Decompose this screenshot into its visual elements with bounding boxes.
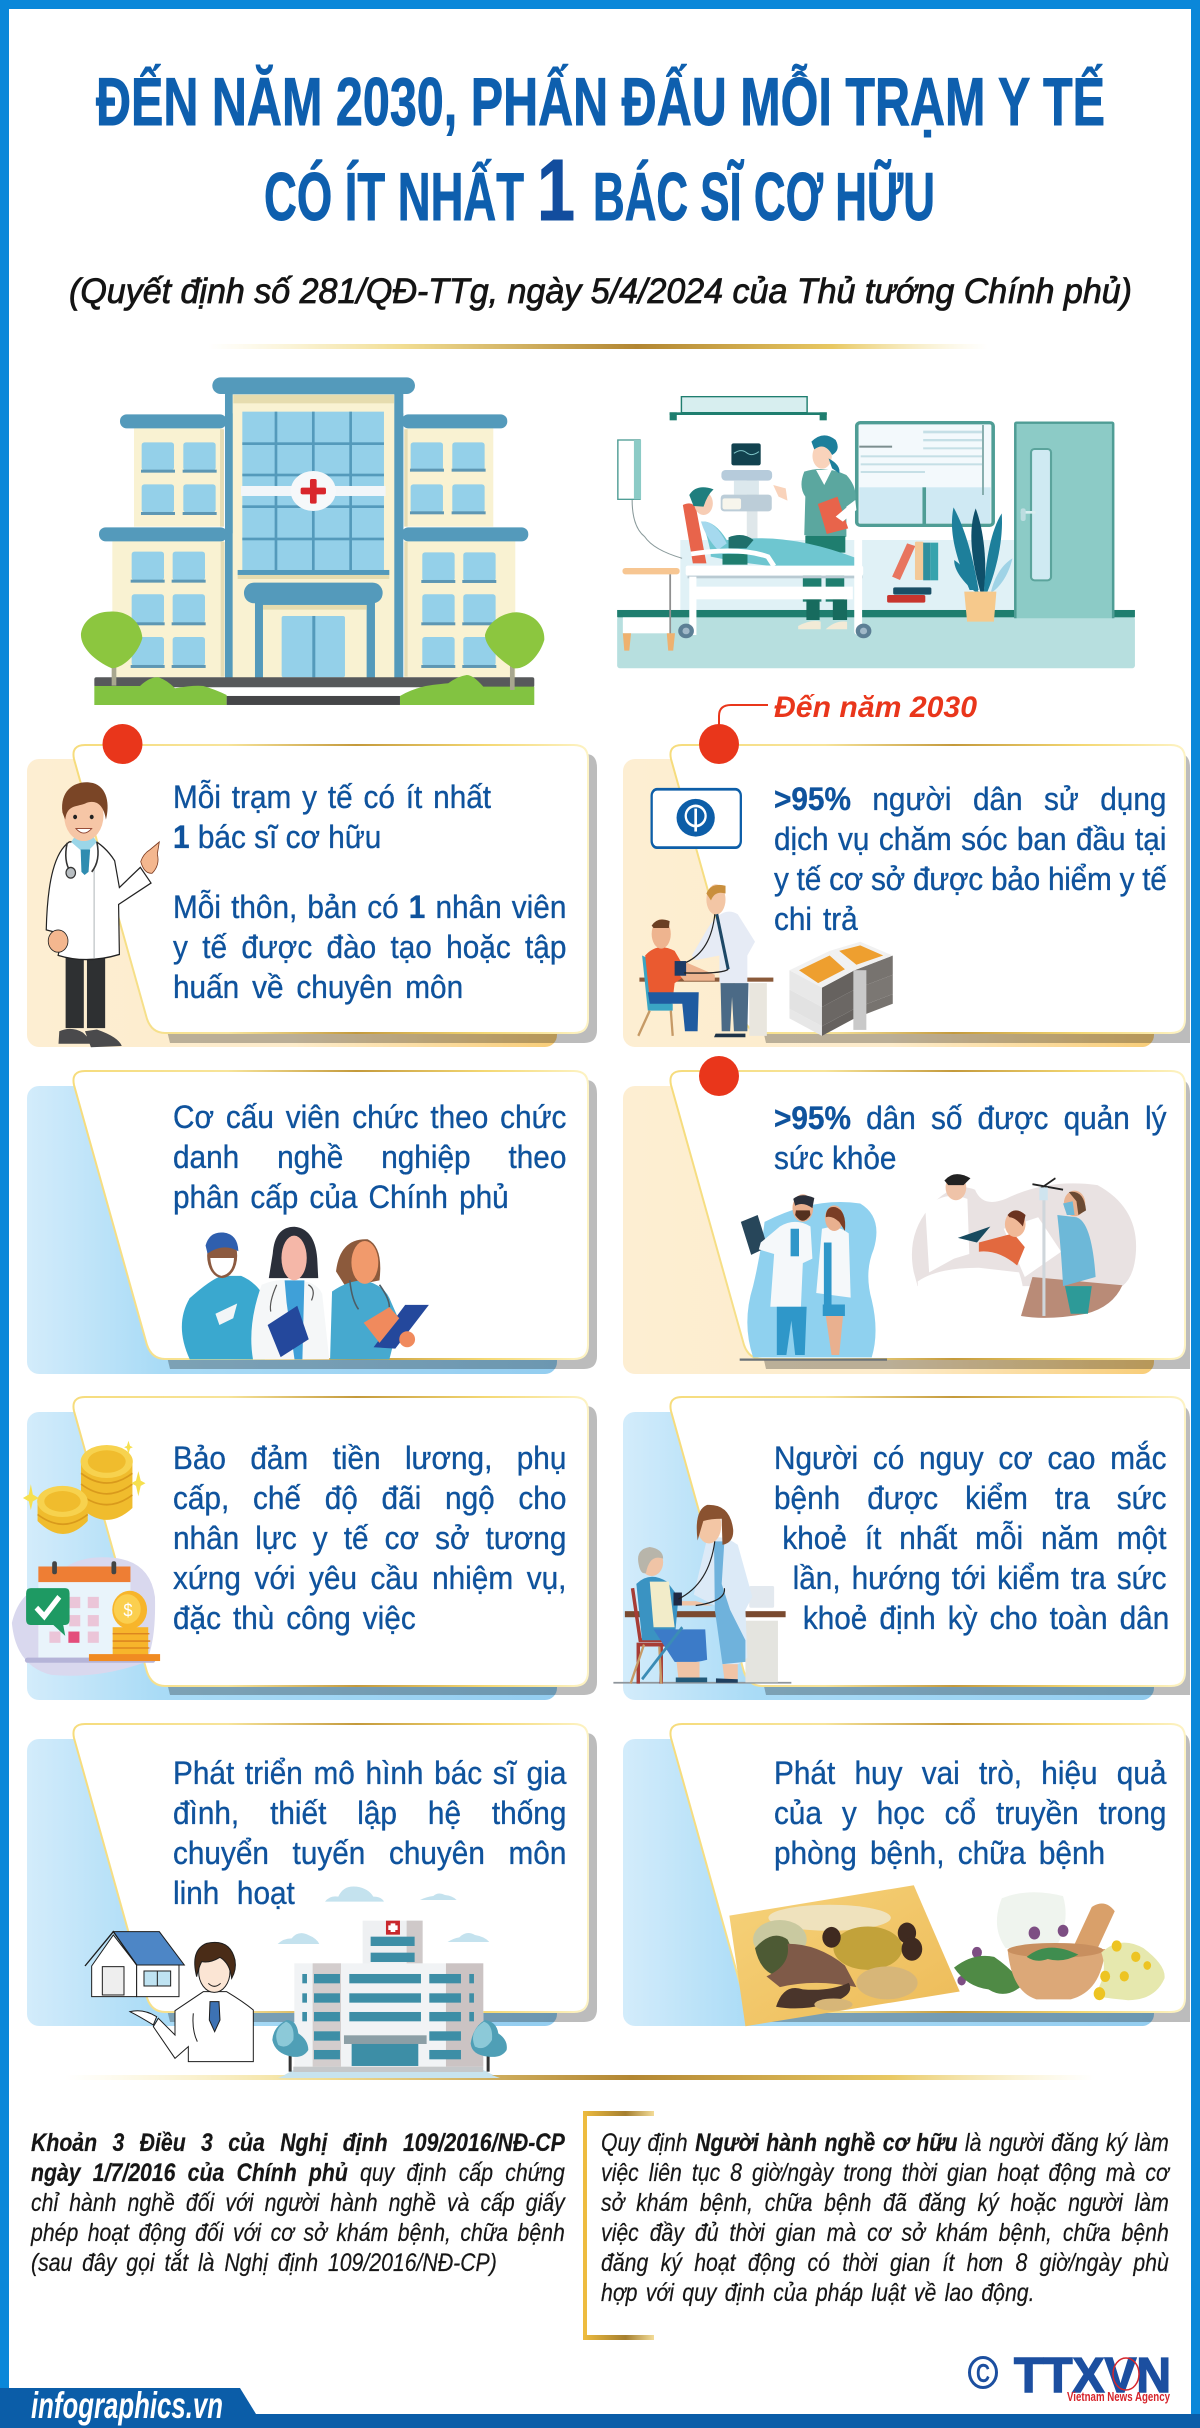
note: left legal reference bbox=[30, 2129, 566, 2277]
herb piles bbox=[753, 1905, 922, 2011]
illustration: blood pressure check bbox=[638, 884, 773, 1037]
text: left 4: chuyển tuyến chuyên môn bbox=[173, 1835, 566, 1871]
bed frame bbox=[686, 566, 863, 576]
title: BÁC SĨ CƠ HỮU bbox=[593, 158, 935, 235]
iv unit bbox=[618, 440, 682, 558]
text: left 4: linh hoạt bbox=[173, 1875, 295, 1911]
note: right definition: việc đầy đủ thời gian mà cơ sở khám bệnh, chữa bệnh bbox=[601, 2219, 1169, 2247]
staff: surgeon bbox=[182, 1232, 265, 1359]
text: right 1: chi trả bbox=[774, 901, 858, 937]
illustration: patient care scene bbox=[912, 1174, 1136, 1318]
text: left 3: đặc thù công việc bbox=[173, 1600, 416, 1636]
note: right definition bbox=[601, 2129, 1170, 2307]
illustration: hospital ward room bbox=[617, 397, 1135, 668]
card backing: right 3 bbox=[623, 1397, 1190, 1700]
nurse bbox=[773, 435, 856, 629]
ward door bbox=[1014, 422, 1114, 618]
doctor male bbox=[759, 1194, 814, 1355]
hospital base over divider bbox=[278, 2072, 500, 2078]
small hospital bbox=[272, 1921, 507, 2078]
illustration: traditional medicine herbs bbox=[729, 1885, 1165, 2026]
text: right 4: của y học cổ truyền trong bbox=[774, 1795, 1166, 1831]
illustration: coins and calendar bbox=[12, 1441, 160, 1676]
text: left 1a bbox=[173, 779, 491, 855]
text: right 2: >95% dân số được quản lý bbox=[774, 1100, 1166, 1136]
text: left 3: xứng với yêu cầu nhiệm vụ, bbox=[173, 1560, 566, 1596]
text: right 1: >95% người dân sử dụng bbox=[774, 781, 1166, 817]
illustration: money stack bbox=[789, 942, 893, 1036]
illustration: coins and calendar: $ bbox=[123, 1600, 133, 1621]
text: left 3: cấp, chế độ đãi ngộ cho bbox=[173, 1480, 566, 1516]
subtitle: (Quyết định số 281/QĐ-TTg, ngày 5/4/2024 của Thủ tướng Chính phủ) bbox=[69, 272, 1132, 311]
bracket bbox=[583, 2111, 654, 2340]
cartoon doctor bbox=[130, 1942, 253, 2062]
text: right 4 bbox=[774, 1755, 1167, 1871]
text: right 4: Phát huy vai trò, hiệu quả bbox=[774, 1755, 1166, 1791]
note: right definition: đăng ký hoạt động có thời gian ít hơn 8 giờ/ngày phù bbox=[601, 2249, 1169, 2277]
card backing: left 4 bbox=[27, 1724, 597, 2026]
patient in bed bbox=[678, 487, 871, 638]
title: CÓ ÍT NHẤT bbox=[264, 158, 524, 235]
text: left 1b: huấn về chuyên môn bbox=[173, 969, 463, 1005]
note: right definition: việc liên tục 8 giờ/ngày trong thời gian hoạt động mà cơ bbox=[601, 2159, 1169, 2187]
staff: doctor with folder bbox=[251, 1227, 329, 1359]
text: right 2 bbox=[774, 1100, 1167, 1176]
clouds bbox=[278, 1886, 489, 1944]
hospital windows bbox=[131, 442, 496, 668]
ward window bbox=[857, 423, 993, 525]
text: right 3: Người có nguy cơ cao mắc bbox=[774, 1440, 1166, 1476]
red markers bbox=[102, 724, 739, 1096]
label line to 2030 bbox=[719, 705, 768, 726]
note: left legal reference: Khoản 3 Điều 3 của Nghị định 109/2016/NĐ-CP bbox=[31, 2129, 565, 2157]
note: left legal reference: ngày 1/7/2016 của Chính phủ quy định cấp chứng bbox=[31, 2159, 565, 2187]
note: right definition: Quy định Người hành nghề cơ hữu là người đăng ký làm bbox=[601, 2129, 1169, 2157]
side table bbox=[622, 568, 680, 651]
ward monitor bbox=[721, 443, 772, 540]
text: right 3: bệnh được kiểm tra sức bbox=[774, 1480, 1166, 1516]
ward plant bbox=[952, 507, 1012, 622]
staff: nurse with clipboard bbox=[330, 1239, 429, 1359]
text: left 4: đình, thiết lập hệ thống bbox=[173, 1795, 566, 1831]
text: right 2: sức khỏe bbox=[774, 1140, 896, 1176]
illustration: medical staff trio bbox=[182, 1227, 429, 1359]
footer site name: infographics.vn bbox=[31, 2385, 223, 2426]
text: left 3: Bảo đảm tiền lương, phụ bbox=[173, 1440, 566, 1476]
label: den nam 2030: Đến năm 2030 bbox=[774, 691, 977, 724]
divider bottom bbox=[65, 2075, 1095, 2080]
text: left 2: danh nghề nghiệp theo bbox=[173, 1139, 566, 1175]
card backing: right 2 bbox=[623, 1071, 1190, 1374]
footer tab bbox=[0, 2388, 256, 2428]
text: left 1b: Mỗi thôn, bản có 1 nhân viên bbox=[173, 889, 566, 925]
ward books bbox=[887, 542, 938, 603]
divider top bbox=[208, 344, 988, 349]
logo TTXVN: TTXVN bbox=[1014, 2349, 1171, 2403]
illustration: elder health check bbox=[613, 1505, 791, 1684]
card backing: left 3 bbox=[27, 1397, 597, 1700]
card backing: left 2 bbox=[27, 1071, 597, 1374]
card backing: right 4 bbox=[623, 1724, 1190, 2026]
note: left legal reference: chỉ hành nghề đối với người hành nghề và cấp giấy bbox=[31, 2189, 565, 2217]
text: left 2: phân cấp của Chính phủ bbox=[173, 1179, 509, 1215]
note: right definition: sở khám bệnh, chữa bệnh đã đăng ký hoặc người làm bbox=[601, 2189, 1169, 2217]
text: left 3 bbox=[173, 1440, 566, 1636]
card backing: right 1 bbox=[623, 745, 1190, 1047]
text: left 2: Cơ cấu viên chức theo chức bbox=[173, 1099, 566, 1135]
text: left 2 bbox=[173, 1099, 566, 1215]
house bbox=[85, 1932, 184, 1997]
text: right 3: khoẻ định kỳ cho toàn dân bbox=[803, 1600, 1169, 1636]
note: left legal reference: phép hoạt động đối với cơ sở khám bệnh, chữa bệnh bbox=[31, 2219, 565, 2247]
text: right 4: phòng bệnh, chữa bệnh bbox=[774, 1835, 1105, 1871]
text: left 4: Phát triển mô hình bác sĩ gia bbox=[173, 1755, 566, 1791]
card backing: left 1 bbox=[27, 745, 597, 1047]
text: left 1b bbox=[172, 889, 566, 1005]
text: right 1: dịch vụ chăm sóc ban đầu tại bbox=[774, 821, 1166, 857]
text: left 3: nhân lực y tế cơ sở tương bbox=[173, 1520, 566, 1556]
doctor female bbox=[816, 1205, 851, 1355]
icon: health insurance card bbox=[652, 789, 741, 848]
text: right 1: y tế cơ sở được bảo hiểm y tế bbox=[774, 861, 1167, 897]
text: right 3 bbox=[774, 1440, 1169, 1636]
mortar and herbs bbox=[954, 1892, 1165, 2000]
illustration: family doctor with house and hospital bbox=[85, 1886, 507, 2078]
text: right 1 bbox=[774, 781, 1167, 937]
title bbox=[96, 63, 1105, 239]
illustration: doctors with x-ray bbox=[740, 1194, 887, 1360]
text: right 3: khoẻ ít nhất mỗi năm một bbox=[782, 1520, 1166, 1556]
copyright mark bbox=[970, 2358, 996, 2388]
text: left 1b: y tế được đào tạo hoặc tập bbox=[173, 929, 566, 965]
text: left 4 bbox=[173, 1755, 567, 1911]
illustration: doctor pointing bbox=[46, 782, 159, 1047]
text: left 1a: 1 bác sĩ cơ hữu bbox=[173, 819, 381, 855]
note: right definition: hợp với quy định của pháp luật về lao động. bbox=[601, 2279, 1034, 2307]
illustration: hospital building bbox=[81, 377, 544, 705]
title: 1 bbox=[537, 142, 575, 239]
herb paper bbox=[729, 1885, 960, 2026]
note: left legal reference: (sau đây gọi tắt là Nghị định 109/2016/NĐ-CP) bbox=[31, 2249, 497, 2277]
text: left 1a: Mỗi trạm y tế có ít nhất bbox=[173, 779, 491, 815]
copyright mark: C bbox=[976, 2358, 990, 2388]
text: right 3: lần, hướng tới kiểm tra sức bbox=[793, 1560, 1166, 1596]
